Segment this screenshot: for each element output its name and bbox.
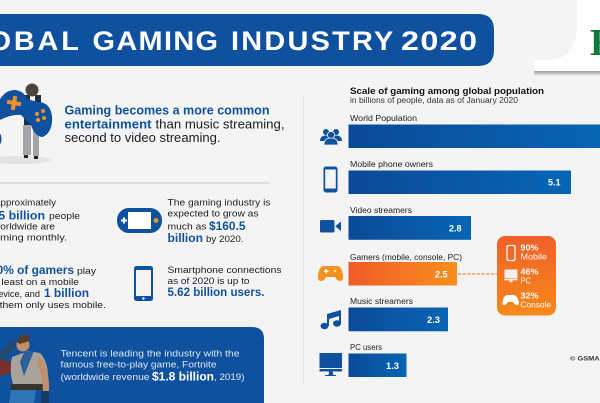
icon: PC [504, 270, 518, 282]
bar: mobile phone owners [348, 159, 571, 194]
stat: market growth [168, 198, 271, 245]
icon: smartphone [134, 266, 153, 301]
bar: gamers: 2.5 [435, 270, 448, 280]
bar: gamers: Gamers (mobile, console, PC) [350, 252, 462, 262]
bar: music streamers: Music streamers [350, 296, 413, 306]
intro text: entertainment [64, 118, 152, 132]
intro text: Gaming becomes a more common [64, 104, 270, 118]
stat: smartphone connections: 5.62 billion users. [168, 287, 264, 299]
callout text: Tencent is leading the industry with the [60, 348, 240, 360]
bar: world population [348, 113, 600, 148]
callout text: famous free-to-play game, Fortnite [60, 360, 216, 370]
bar chart: scale of gaming [318, 113, 600, 377]
icon: video camera [320, 220, 341, 232]
intro text: second to video streaming. [64, 131, 220, 145]
bar: world population: World Population [350, 113, 417, 123]
callout text: , 2019) [214, 372, 244, 383]
icon: gamepad [318, 266, 343, 281]
dashed connector [458, 273, 497, 275]
stat: market growth: The gaming industry is [168, 198, 271, 208]
icon: desktop monitor [320, 353, 342, 376]
title text: 2020 [401, 26, 478, 56]
stat: market growth: expected to grow as [168, 208, 259, 220]
bar: music streamers: 2.3 [427, 315, 440, 326]
bar: PC users: PC users [350, 342, 382, 352]
title text: INDUSTRY [231, 26, 396, 56]
text: mobile share: 90% [520, 242, 539, 252]
stat: smartphone connections: as of 2020 is up to [168, 276, 250, 287]
icon: people [320, 129, 342, 145]
bar: PC users: 1.3 [386, 361, 399, 372]
bar: PC users [348, 342, 406, 377]
panel: gamer platforms: Console [520, 300, 551, 310]
text: console share: 32% [520, 290, 539, 300]
stat: smartphone connections: Smartphone connections [168, 265, 282, 276]
bar: music streamers [348, 296, 448, 331]
illustration: person holding controller [0, 84, 52, 164]
icon: console gamepad [502, 295, 519, 305]
stat: smartphone connections [168, 265, 282, 299]
bar: gamers [348, 252, 462, 286]
panel: gamer platforms [497, 236, 556, 316]
bar: mobile phone owners: Mobile phone owners [350, 159, 433, 169]
chart heading: in billions of people, data as of January 2020 [350, 96, 519, 105]
stat: 2.5 billion gamers: people [49, 211, 80, 222]
callout text: $1.8 billion [152, 372, 214, 384]
bar: video streamers: 2.8 [449, 224, 462, 234]
panel: gamer platforms: PC [520, 276, 531, 286]
chart heading: Scale of gaming among global population [350, 86, 544, 96]
stat: market growth: $160.5 [209, 221, 246, 233]
bar: video streamers [348, 205, 471, 240]
logo tab [534, 0, 600, 76]
title banner [0, 14, 494, 66]
stat: mobile share: play [77, 266, 96, 277]
stat: market growth: billion [168, 233, 203, 245]
panel: Tencent callout [0, 327, 264, 403]
intro text: than music streaming, [156, 118, 284, 132]
bar: mobile phone owners: 5.1 [548, 178, 561, 188]
icon: music note [320, 310, 341, 329]
chart heading [350, 86, 544, 105]
callout text: (worldwide revenue [60, 372, 150, 383]
panel: gamer platforms: Mobile [520, 252, 547, 262]
title text: GAMING [92, 26, 219, 56]
text: PC share: 46% [520, 266, 539, 276]
callout text [60, 348, 244, 384]
bar: video streamers: Video streamers [350, 205, 412, 215]
stat: mobile share: 1 billion [44, 288, 89, 300]
stat: market growth: by 2020. [206, 234, 244, 245]
icon: mobile [324, 166, 338, 192]
title text [0, 26, 478, 56]
intro text [64, 104, 284, 145]
stat: market growth: much as [168, 222, 207, 232]
stat: 2.5 billion gamers [0, 198, 80, 244]
character illustration [0, 335, 49, 403]
stat: mobile share [0, 265, 106, 311]
icon: mobile [507, 246, 515, 260]
icon: handheld console [117, 208, 162, 233]
